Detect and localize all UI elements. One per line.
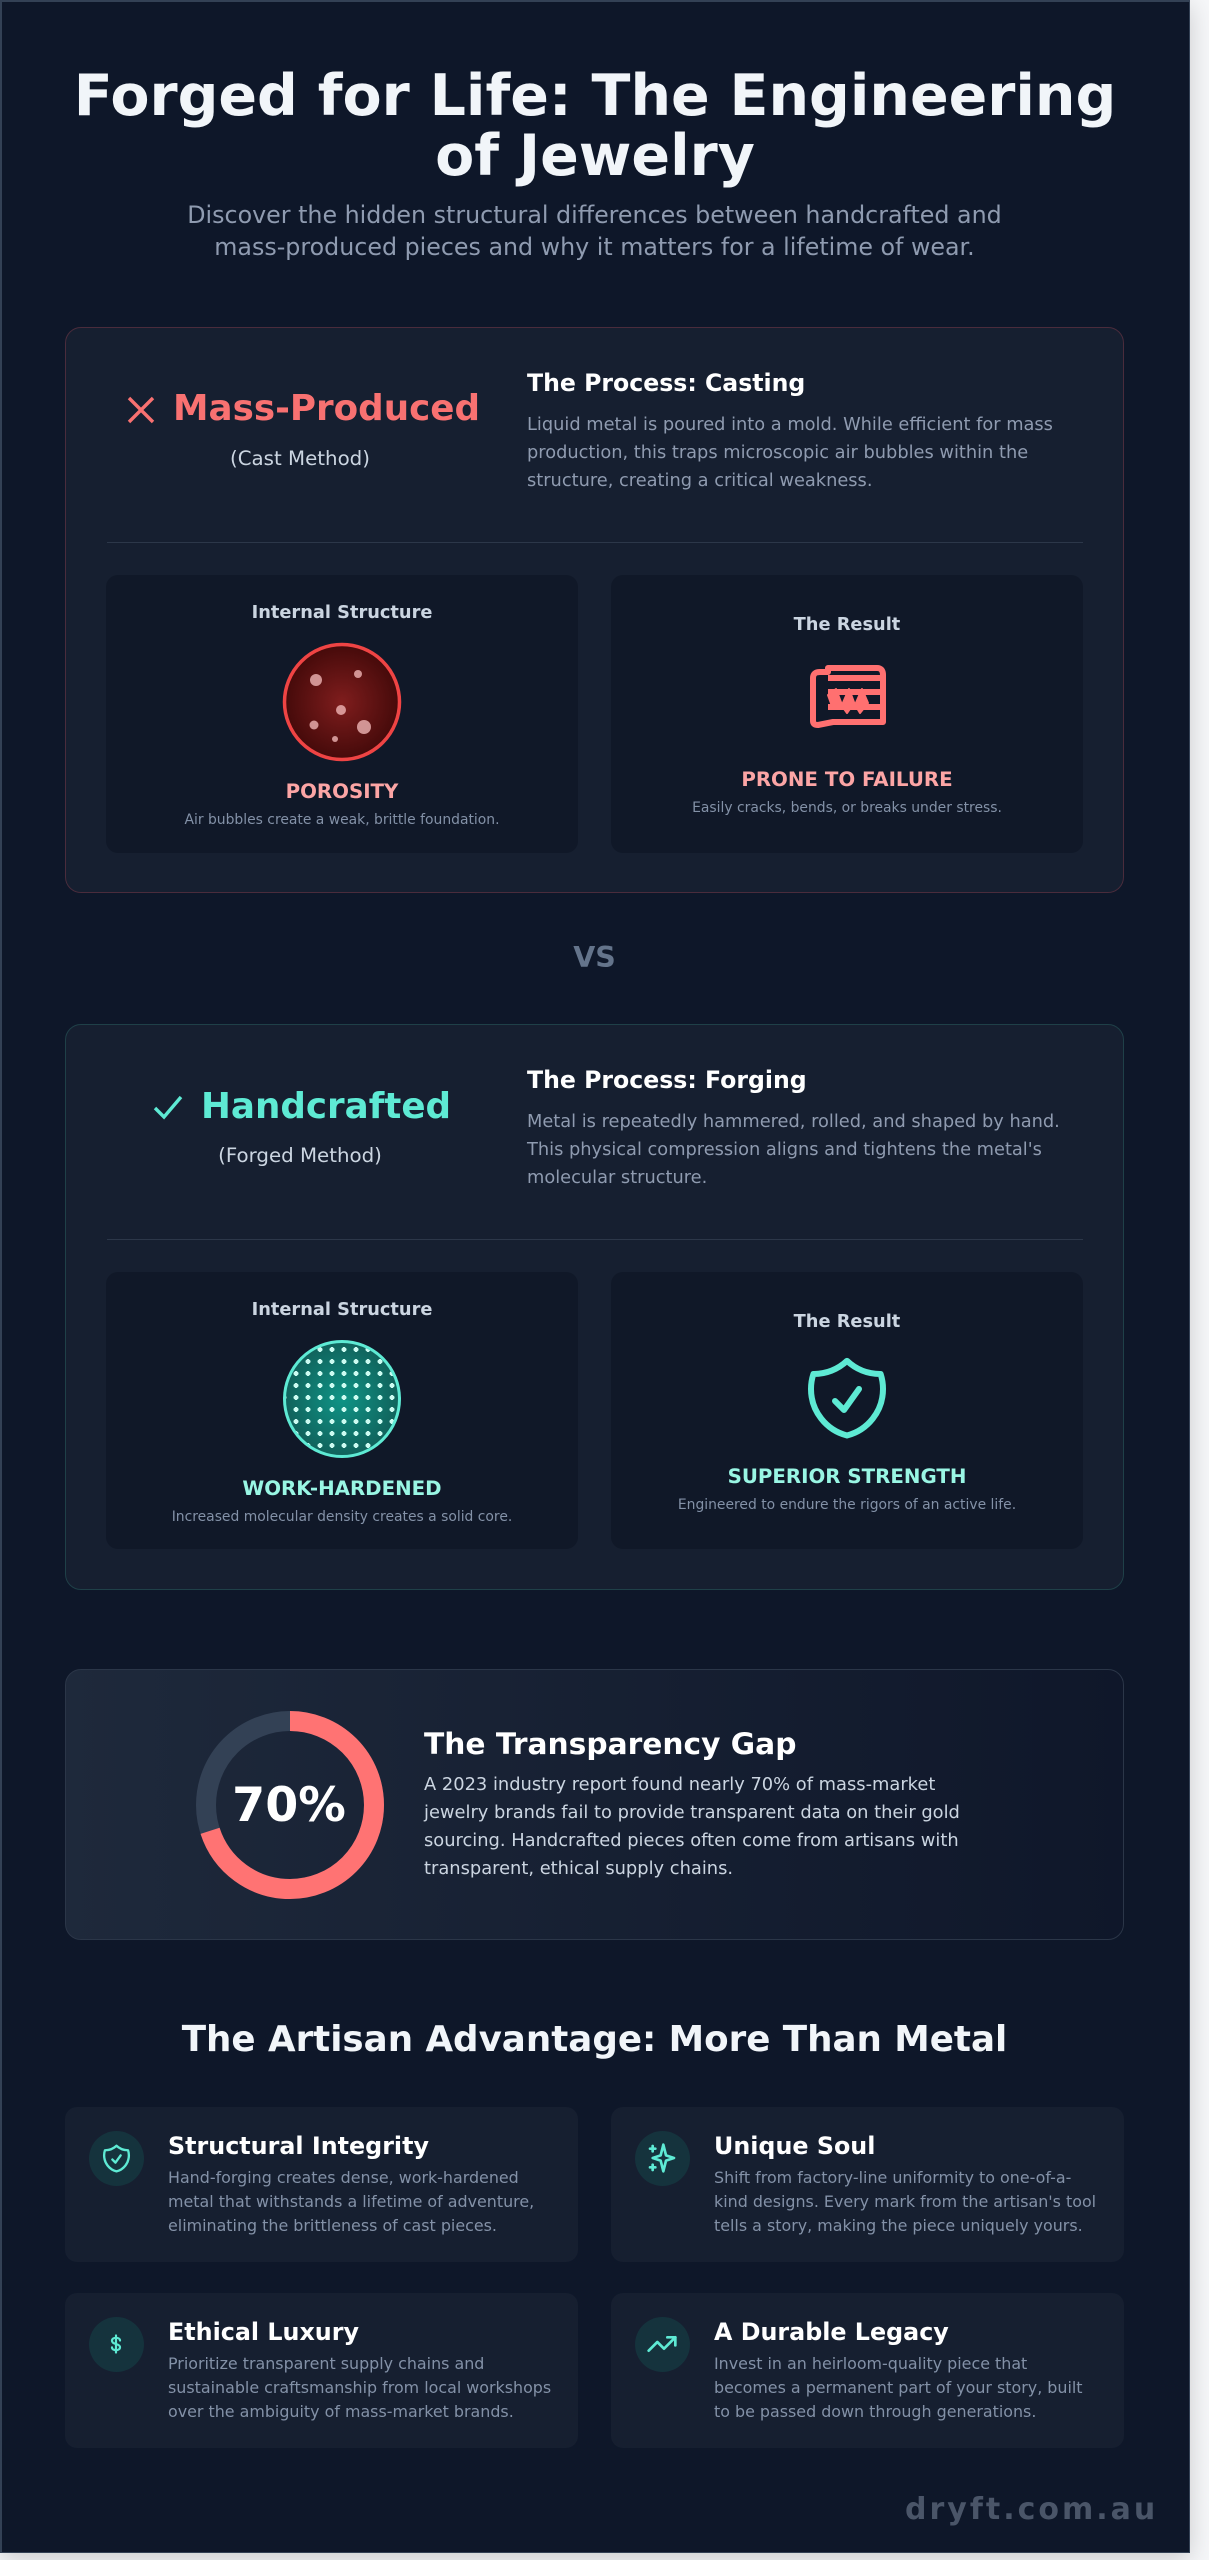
text: Engineered to endure the rigors of an active life.	[678, 1497, 1016, 1513]
text: Easily cracks, bends, or breaks under stress.	[692, 800, 1002, 816]
icon: sparkles	[635, 2131, 690, 2186]
text: forging description: molecular structure.	[527, 1167, 707, 1188]
text	[714, 2354, 1083, 2421]
label: porosity: POROSITY	[286, 780, 398, 803]
icon: dense circle	[283, 1340, 401, 1458]
sublabel: cast method: (Cast Method)	[230, 447, 370, 470]
text: forging description	[526, 1111, 1060, 1188]
text: casting description	[527, 414, 1053, 491]
label: prone to failure: PRONE TO FAILURE	[741, 768, 953, 791]
icon: porous circle	[282, 642, 402, 762]
text: sourcing. Handcrafted pieces often come from artisans with	[424, 1830, 959, 1851]
text: Hand-forging creates dense, work-hardened	[168, 2168, 519, 2187]
text: tells a story, making the piece uniquely yours.	[714, 2216, 1083, 2235]
footer: brand: dryft.com.au	[905, 2492, 1158, 2527]
text: forging description: This physical compression aligns and tightens the metal's	[527, 1139, 1042, 1160]
text: Invest in an heirloom-quality piece that	[714, 2354, 1027, 2373]
label: The Result	[794, 614, 900, 635]
text: A 2023 industry report found nearly 70% of mass-market	[424, 1774, 935, 1795]
text: forging description: Metal is repeatedly hammered, rolled, and shaped by hand.	[527, 1111, 1060, 1132]
icon: shield	[89, 2131, 144, 2186]
text: metal that withstands a lifetime of adventure,	[168, 2192, 534, 2211]
panel: transparency gap	[65, 1669, 1124, 1940]
text: becomes a permanent part of your story, built	[714, 2378, 1083, 2397]
label: work-hardened: WORK-HARDENED	[242, 1477, 442, 1500]
icon: trending up	[635, 2317, 690, 2372]
title: of Jewelry	[435, 123, 755, 189]
panel: work-hardened structure	[106, 1272, 578, 1549]
text: Increased molecular density creates a solid core.	[172, 1509, 512, 1525]
text: jewelry brands fail to provide transparent data on their gold	[424, 1802, 960, 1823]
card: ethical luxury	[65, 2293, 578, 2448]
title: Structural Integrity	[168, 2132, 429, 2160]
text: sustainable craftsmanship from local workshops	[168, 2378, 551, 2397]
text: casting description: production, this traps microscopic air bubbles within the	[527, 442, 1028, 463]
label: superior strength: SUPERIOR STRENGTH	[728, 1465, 966, 1488]
chart: 70 percent donut: 70%	[232, 1778, 346, 1833]
panel: mass-produced	[65, 327, 1124, 893]
icon: cracked plate	[810, 665, 886, 728]
label: vs: VS	[573, 941, 616, 974]
icon: shield check	[808, 1358, 886, 1438]
text: Air bubbles create a weak, brittle foundation.	[184, 812, 499, 828]
heading: forging process: The Process: Forging	[527, 1066, 807, 1094]
heading: artisan advantage: The Artisan Advantage: More Than Metal	[182, 2019, 1007, 2060]
subtitle: Discover the hidden structural differences between handcrafted and	[187, 201, 1002, 229]
heading: mass-produced: Mass-Produced	[173, 388, 480, 429]
icon: x mark	[128, 396, 154, 424]
title: Unique Soul	[714, 2132, 875, 2160]
title	[74, 63, 1116, 189]
text	[168, 2168, 534, 2235]
icon: check mark	[154, 1096, 182, 1120]
label: The Result	[794, 1311, 900, 1332]
heading: casting process: The Process: Casting	[527, 369, 805, 397]
text: eliminating the brittleness of cast pieces.	[168, 2216, 497, 2235]
card: structural integrity	[65, 2107, 578, 2262]
panel: handcrafted	[65, 1024, 1124, 1590]
subtitle: mass-produced pieces and why it matters for a lifetime of wear.	[214, 233, 975, 261]
title: A Durable Legacy	[714, 2318, 949, 2346]
panel: failure result	[611, 575, 1083, 853]
heading: The Transparency Gap	[424, 1727, 796, 1762]
text: transparent, ethical supply chains.	[424, 1858, 733, 1879]
subtitle	[187, 201, 1002, 261]
text	[168, 2354, 551, 2421]
text: to be passed down through generations.	[714, 2402, 1036, 2421]
panel: strength result	[611, 1272, 1083, 1549]
text: Shift from factory-line uniformity to one-of-a-	[714, 2168, 1071, 2187]
text	[424, 1774, 960, 1879]
text	[714, 2168, 1096, 2235]
label: Internal Structure	[252, 1299, 432, 1320]
sublabel: forged method: (Forged Method)	[218, 1144, 382, 1167]
icon: dollar	[89, 2317, 144, 2372]
text: casting description: Liquid metal is poured into a mold. While efficient for mass	[527, 414, 1053, 435]
text: over the ambiguity of mass-market brands.	[168, 2402, 514, 2421]
text: casting description: structure, creating a critical weakness.	[527, 470, 872, 491]
text: Prioritize transparent supply chains and	[168, 2354, 484, 2373]
card: durable legacy	[611, 2293, 1124, 2448]
title: Ethical Luxury	[168, 2318, 359, 2346]
text: kind designs. Every mark from the artisan's tool	[714, 2192, 1096, 2211]
chart: 70 percent donut	[196, 1711, 384, 1899]
label: Internal Structure	[252, 602, 432, 623]
card: unique soul	[611, 2107, 1124, 2262]
panel: porosity structure	[106, 575, 578, 853]
heading: handcrafted: Handcrafted	[201, 1086, 451, 1127]
title: Forged for Life: The Engineering	[74, 63, 1116, 129]
